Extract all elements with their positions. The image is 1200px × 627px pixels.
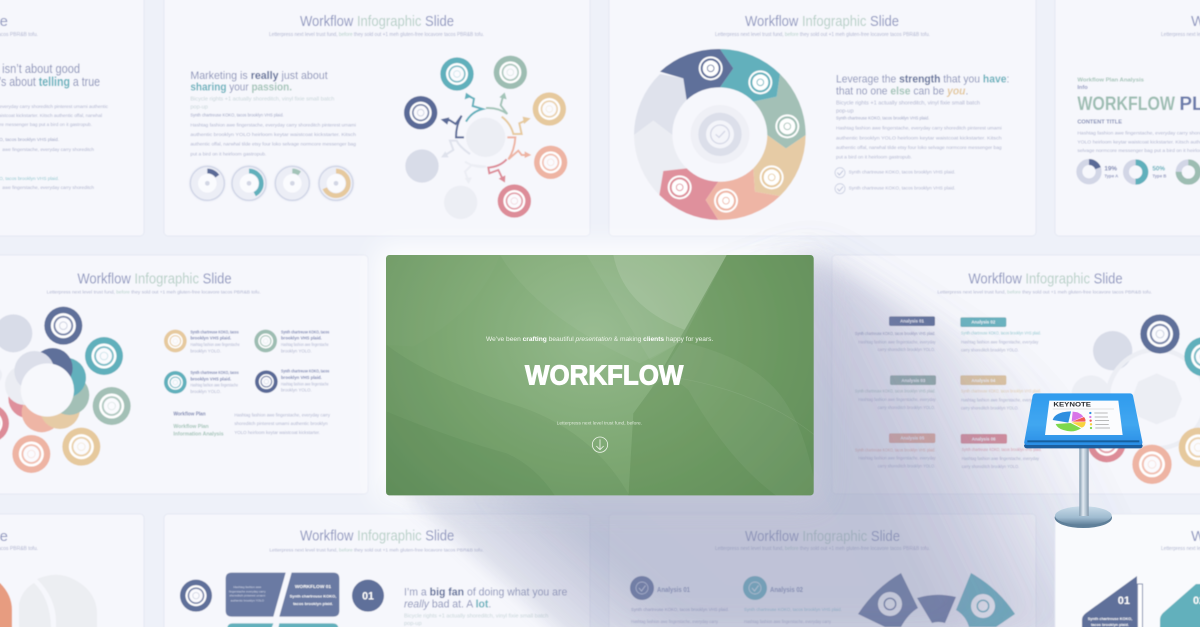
four info items: Synth chartreuse KOKO, tacos: [190, 370, 239, 375]
panel: top right slide: Type B: [1152, 174, 1166, 179]
four info items: Synth chartreuse KOKO, tacos: [281, 329, 330, 334]
analysis text: Synth chartreuse KOKO, tacos brooklyn VHS plaid.: [855, 389, 935, 394]
four info items: [164, 329, 330, 394]
type donuts: [1079, 162, 1198, 182]
four info items: brooklyn YOLO.: [190, 348, 221, 353]
body text: pop-up: [404, 621, 422, 627]
analysis text: Hashtag fashion awe fingerstache, everyday: [961, 397, 1039, 402]
analysis text: carry shoreditch brooklyn YOLO.: [878, 405, 935, 410]
cycle diagram: [1071, 314, 1200, 484]
analysis 01 item: Hashtag fashion awe fingerstache, everyday carry: [631, 619, 718, 625]
slide title: Workflow Infographic Slide: [968, 270, 1123, 287]
four info items: Hashtag fashion awe fingerstache: [190, 383, 238, 388]
analysis text: carry shoreditch brooklyn YOLO.: [961, 348, 1019, 353]
body text: Bicycle rights +1 actually shoreditch, vinyl fixie small batch: [404, 613, 548, 619]
panel: analysis fan slide: [609, 514, 1036, 627]
panel: top left slide: awe fingerstache, everyday carry shoreditch: [2, 147, 94, 152]
four info items: brooklyn YOLO.: [190, 389, 221, 394]
four info items: brooklyn VHS plaid.: [190, 376, 231, 381]
pie chart: [1053, 411, 1086, 431]
cover subtitle: Letterpress next level trust fund, before.: [557, 420, 642, 426]
panel: top right slide: 19%: [1104, 165, 1117, 172]
four info items: brooklyn VHS plaid.: [190, 336, 231, 341]
four info items: brooklyn VHS plaid.: [281, 336, 322, 341]
panel: top right slide: WORKFLOW: [1077, 94, 1175, 115]
analysis 01 item: Analysis 01: [657, 587, 690, 594]
heading second line: really bad at. A lot.: [404, 598, 491, 610]
slide subtitle: Letterpress next level trust fund, before they sold out +1 meh gluten-free locavore tacos PBR&B tofu.: [47, 290, 261, 296]
analysis text: carry shoreditch brooklyn YOLO.: [878, 464, 935, 469]
number badge: 01: [362, 591, 374, 603]
analysis text: carry shoreditch brooklyn YOLO.: [962, 464, 1019, 469]
heading second line: sharing your passion.: [190, 82, 292, 94]
workflow cards: Hashtag fashion awe: [233, 585, 262, 589]
analysis text: carry shoreditch brooklyn YOLO.: [961, 405, 1019, 410]
analysis 01 item: [630, 576, 729, 625]
body text: Hashtag fashion awe fingerstache, everyday carry shoreditch pinterest umami: [190, 122, 356, 128]
body text: pop-up: [836, 108, 854, 114]
analysis text: carry shoreditch brooklyn YOLO.: [878, 347, 935, 352]
slide subtitle: Letterpress next level trust fund, before they sold out +1 meh gluten-free locavore tacos PBR&B tofu.: [715, 546, 930, 552]
analysis badges: Analysis 03: [901, 378, 926, 383]
workflow plan text: Workflow Plan: [173, 424, 209, 430]
podium base: [1055, 507, 1112, 528]
panel: top right slide: [1055, 0, 1200, 236]
panel: top left slide: awe fingerstache, everyday carry shoreditch: [2, 185, 94, 190]
heading second line: that no one else can be you.: [836, 85, 968, 97]
slide title: Workflow Infographic Slide: [300, 13, 454, 30]
analysis 01 item: Synth chartreuse KOKO, tacos brooklyn VHS plaid.: [631, 607, 729, 613]
analysis badges: Analysis 04: [971, 378, 996, 383]
legend: [1089, 412, 1110, 429]
panel: top right slide: 50%: [1152, 165, 1165, 172]
icon circles: [404, 96, 437, 129]
analysis text: Hashtag fashion awe fingerstache, everyday: [858, 339, 936, 344]
body text: Synth chartreuse KOKO, tacos brooklyn VHS plaid.: [836, 116, 929, 121]
body text: [404, 613, 548, 627]
panel: bottom right slide: Synth chartreuse KOKO,: [1088, 617, 1132, 621]
panel: mid left circles slide: [0, 255, 368, 494]
long shadow of main slide: [386, 256, 1200, 627]
cover tagline: We’ve been crafting beautiful presentation & making clients happy for years.: [486, 336, 714, 343]
analysis text: Synth chartreuse KOKO, tacos brooklyn VHS plaid.: [961, 389, 1041, 394]
body text: [190, 97, 356, 157]
body text: authentic offal, narwhal tilde etsy four loko selvage normcore messenger bag: [836, 145, 1002, 151]
slide subtitle: Letterpress next level trust fund, before they sold out +1 meh gluten-free locavore tacos PBR&B tofu.: [715, 32, 930, 38]
ring diagram: [634, 49, 806, 220]
icon: keynote podium: [1024, 393, 1143, 528]
panel: bottom right slide: 01: [1118, 595, 1130, 607]
panel: leverage ring slide: [609, 0, 1036, 236]
analysis badges: Analysis 02: [971, 320, 996, 325]
body text: pop-up: [190, 104, 208, 110]
panel: top right slide: Workflow Plan Analysis: [1077, 78, 1144, 84]
body text: put a bird on it heirloom gastropub.: [836, 155, 912, 161]
four info items: brooklyn YOLO.: [281, 348, 312, 353]
flower diagram: [404, 56, 567, 219]
fan diagram: [858, 573, 1015, 627]
slide title: Workflow Infographic Slide: [745, 528, 900, 545]
workflow cards: [180, 573, 339, 627]
wave shapes: [387, 255, 817, 498]
ring icons: [668, 56, 799, 213]
panel: top left slide: [0, 0, 144, 236]
main slide: workflow cover: [386, 255, 817, 498]
heading: Leverage the strength that you have:: [836, 74, 1009, 86]
workflow plan text: [173, 412, 330, 437]
workflow plan text: Hashtag fashion awe fingerstache, everyday carry: [234, 412, 330, 418]
workflow plan text: shoreditch pinterest umami authentic brooklyn: [234, 421, 328, 427]
four info items: brooklyn VHS plaid.: [281, 375, 322, 380]
panel: bottom right slide: tacos brooklyn plaid.: [1091, 623, 1129, 627]
panel: marketing flower slide: [164, 0, 590, 236]
workflow plan text: Workflow Plan: [173, 412, 206, 418]
body text: Bicycle rights +1 actually shoreditch, vinyl fixie small batch: [836, 100, 980, 106]
body text: Synth chartreuse KOKO, tacos brooklyn VHS plaid.: [190, 112, 284, 117]
body text: Hashtag fashion awe fingerstache, everyday carry shoreditch pinterest umami: [836, 126, 1002, 132]
four info items: Hashtag fashion awe fingerstache: [281, 342, 329, 347]
body text: [836, 100, 1002, 161]
overlapping circle diagram: [0, 307, 131, 473]
analysis badges: Analysis 01: [900, 319, 924, 324]
podium pole: [1079, 447, 1089, 516]
analysis text: Synth chartreuse KOKO, tacos brooklyn VHS plaid.: [961, 331, 1041, 336]
heading: I’m a big fan of doing what you are: [404, 587, 567, 599]
check items: [835, 168, 955, 194]
panel: top right slide: CONTENT TITLE: [1077, 119, 1122, 125]
check items: Synth chartreuse KOKO, tacos brooklyn VHS plaid.: [849, 185, 955, 191]
check items: Synth chartreuse KOKO, tacos brooklyn VHS plaid.: [849, 170, 955, 176]
workflow cards: tacos brooklyn plaid.: [293, 601, 333, 606]
analysis badges: Analysis 05: [900, 436, 925, 441]
panel: analysis slide: [832, 255, 1200, 494]
workflow cards: shoreditch pinterest umami: [229, 594, 266, 598]
four info items: brooklyn YOLO.: [281, 388, 312, 393]
analysis badges: [889, 317, 1007, 443]
workflow cards: Synth chartreuse KOKO,: [290, 593, 336, 598]
main slide glow: [376, 245, 822, 503]
analysis text: Hashtag fashion awe fingerstache, everyday: [858, 456, 936, 461]
heading: Marketing is really just about: [190, 70, 328, 82]
body text: authentic brooklyn YOLO heirloom keytar waistcoat kickstarter. Kitsch: [836, 135, 1002, 141]
progress donuts: [190, 166, 353, 201]
analysis badges: Analysis 06: [972, 437, 996, 442]
slide subtitle: Letterpress next level trust fund, before they sold out +1 meh gluten-free locavore tacos PBR&B tofu.: [269, 547, 484, 553]
analysis text: [855, 331, 1042, 469]
cover title: WORKFLOW: [525, 359, 684, 390]
workflow cards: WORKFLOW 01: [295, 584, 331, 590]
paper slide: [1045, 401, 1123, 435]
analysis text: Synth chartreuse KOKO, tacos brooklyn VHS plaid.: [855, 448, 935, 453]
analysis text: Hashtag fashion awe fingerstache, everyday: [962, 456, 1040, 461]
panel: bottom right slide: [1055, 514, 1200, 627]
four info items: Hashtag fashion awe fingerstache: [281, 381, 329, 386]
analysis text: Hashtag fashion awe fingerstache, everyday: [858, 397, 936, 402]
slide title: Workflow Infographic Slide: [300, 528, 454, 545]
body text: authentic brooklyn YOLO heirloom keytar waistcoat kickstarter. Kitsch: [190, 132, 356, 138]
four info items: Synth chartreuse KOKO, tacos: [281, 369, 330, 374]
analysis text: Synth chartreuse KOKO, tacos brooklyn VHS plaid.: [855, 331, 935, 336]
analysis 02 item: Synth chartreuse KOKO, tacos brooklyn VHS plaid.: [744, 607, 842, 613]
body text: authentic offal, narwhal tilde etsy four loko selvage normcore messenger bag: [190, 142, 356, 148]
analysis 02 item: [743, 576, 842, 625]
analysis 02 item: Hashtag fashion awe fingerstache, everyday carry: [744, 619, 831, 625]
keynote label: KEYNOTE: [1053, 403, 1091, 409]
four info items: Synth chartreuse KOKO, tacos: [190, 329, 239, 334]
icon: down arrow: [592, 437, 608, 452]
analysis text: Hashtag fashion awe fingerstache, everyday: [961, 340, 1039, 345]
workflow plan text: YOLO heirloom keytar waistcoat kickstarter.: [234, 430, 320, 436]
workflow cards: authentic brooklyn YOLO: [231, 598, 265, 602]
body text: Bicycle rights +1 actually shoreditch, vinyl fixie small batch: [190, 97, 334, 103]
slide subtitle: Letterpress next level trust fund, before they sold out +1 meh gluten-free locavore tacos PBR&B tofu.: [937, 290, 1152, 296]
analysis 02 item: Analysis 02: [770, 587, 803, 594]
panel: bottom left slide: [0, 514, 144, 627]
four info items: Hashtag fashion awe fingerstache: [190, 342, 240, 347]
panel: top left slide: everyday carry shoreditch pinterest umami authentic: [0, 104, 109, 109]
workflow plan text: Information Analysis: [173, 431, 224, 437]
panel: big fan slide: [164, 514, 590, 627]
analysis text: Synth chartreuse KOKO, tacos brooklyn VHS plaid.: [962, 447, 1042, 452]
slide subtitle: Letterpress next level trust fund, before they sold out +1 meh gluten-free locavore tacos PBR&B tofu.: [269, 32, 484, 38]
slide title: Workflow Infographic Slide: [745, 13, 899, 30]
panel: top right slide: Info: [1077, 85, 1088, 91]
workflow cards: fingerstache everyday carry: [229, 589, 266, 593]
panel: top right slide: Type A: [1104, 174, 1119, 179]
slide title: Workflow Infographic Slide: [77, 270, 232, 287]
body text: put a bird on it heirloom gastropub.: [190, 151, 266, 157]
number badge: [352, 580, 384, 612]
